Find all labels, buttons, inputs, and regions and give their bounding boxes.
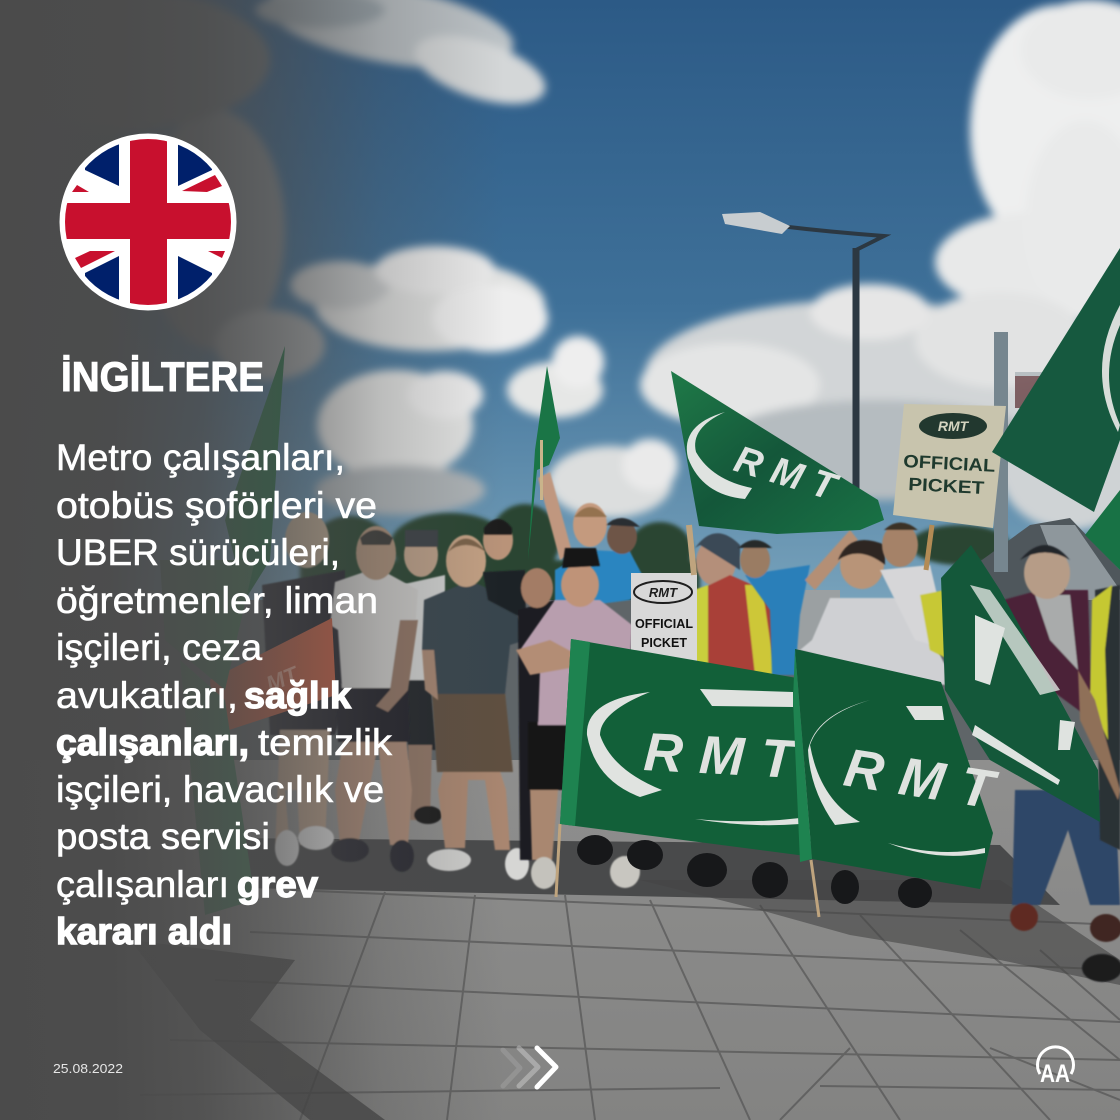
top RMT flag: R M T xyxy=(729,438,843,510)
body text block: işçileri, havacılık ve xyxy=(56,769,384,810)
icon: UK flag roundel xyxy=(60,130,240,310)
person: red polo with hi-vis vest xyxy=(694,533,785,680)
main RMT banner right: RMT xyxy=(840,738,1002,821)
small raised flag xyxy=(528,366,560,560)
person: polo and khaki shorts xyxy=(422,535,529,880)
body text block: posta servisi xyxy=(56,816,270,857)
main RMT banner left: RMT xyxy=(642,722,799,790)
body text block: kararı aldı xyxy=(56,911,232,952)
person: white blouse xyxy=(800,540,945,685)
trees on horizon xyxy=(300,504,1010,610)
sky xyxy=(0,0,1120,620)
date: 25.08.2022 xyxy=(53,1061,123,1076)
body text block: Metro çalışanları, xyxy=(56,437,345,478)
body text block: sağlık xyxy=(244,675,351,716)
picket sign: white: PICKET xyxy=(641,635,687,650)
person: maroon jacket xyxy=(1003,545,1120,942)
clouds xyxy=(255,0,1120,530)
person: blue tee, arm raised xyxy=(538,472,645,610)
picket sign: white: RMT xyxy=(649,585,678,600)
picket sign: white xyxy=(631,573,697,661)
tactile strip xyxy=(230,838,1060,905)
picket sign: beige xyxy=(893,404,1006,570)
body text block: temizlik xyxy=(258,722,393,763)
pavement xyxy=(0,760,1120,1120)
body text block: öğretmenler, liman xyxy=(56,580,378,621)
top-right green flag xyxy=(992,248,1120,570)
shadows on pavement xyxy=(130,940,385,1120)
logo: Anadolu Agency xyxy=(1038,1047,1074,1088)
right RMT banner xyxy=(941,545,1100,822)
person far left xyxy=(262,512,345,866)
orange banner on left: MT xyxy=(263,661,303,697)
dark cloud on left xyxy=(0,0,325,380)
person behind: white tee xyxy=(400,530,445,824)
body text block: işçileri, ceza xyxy=(56,627,262,668)
person far right xyxy=(1078,585,1120,982)
building on right xyxy=(975,518,1120,640)
feet behind banners xyxy=(577,835,932,908)
body text block: UBER sürücüleri, xyxy=(56,532,340,573)
person: pink tee xyxy=(516,548,640,889)
body text block: çalışanları, xyxy=(56,722,249,763)
body text block: çalışanları xyxy=(56,864,229,905)
heading: country name: İNGİLTERE xyxy=(61,353,264,400)
body text block: grev xyxy=(237,864,318,905)
person: black cap behind xyxy=(483,519,555,860)
green flags on far left xyxy=(160,346,285,915)
icon: next chevrons xyxy=(503,1048,556,1087)
main RMT banner right xyxy=(793,649,1002,889)
logo: Anadolu Agency: AA xyxy=(1040,1060,1070,1088)
person: white tee and vest xyxy=(880,522,950,660)
street lamp xyxy=(722,212,884,490)
body text block xyxy=(56,437,393,952)
person: grey tee xyxy=(330,526,418,872)
foreground graphics and text xyxy=(54,134,1075,1090)
orange banner on left xyxy=(210,618,336,735)
picket sign: beige: PICKET xyxy=(908,474,985,498)
picket sign: white: OFFICIAL xyxy=(635,616,693,631)
background wall and road behind group xyxy=(0,600,1120,840)
picket sign: beige: OFFICIAL xyxy=(903,451,996,476)
person: blue shirt, arm raised xyxy=(738,530,858,675)
main RMT banner left xyxy=(560,639,806,856)
body text block: otobüs şoförleri ve xyxy=(56,485,377,526)
banner poles xyxy=(556,525,819,917)
picket sign: beige: RMT xyxy=(938,418,970,434)
top RMT flag xyxy=(671,371,884,534)
signpost xyxy=(994,332,1120,572)
body text block: avukatları, xyxy=(56,675,238,716)
